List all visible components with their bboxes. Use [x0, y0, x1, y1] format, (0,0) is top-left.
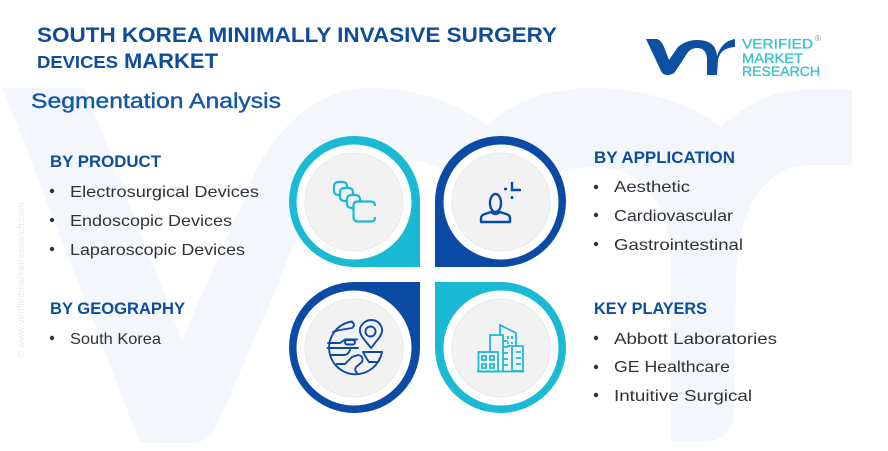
heading: by application: BY APPLICATION [594, 149, 735, 167]
logo wordmark: MARKET [742, 50, 803, 66]
panel: key players [594, 300, 777, 405]
title: DEVICES [37, 52, 118, 72]
list: applications: Aesthetic [614, 179, 690, 196]
logo mark: vm monogram [646, 39, 735, 75]
subtitle: segmentation analysis: Segmentation Analysis [31, 89, 281, 113]
list: key players: Intuitive Surgical [614, 388, 752, 405]
logo wordmark: RESEARCH [742, 63, 820, 79]
list: key players: Abbott Laboratories [614, 331, 777, 348]
logo registered mark: ® [815, 34, 821, 43]
list: key players [594, 331, 777, 405]
logo wordmark: VERIFIED [742, 36, 813, 52]
heading: key players: KEY PLAYERS [594, 300, 707, 318]
watermark: website url: © www.verifiedmarketresearch.com [16, 202, 26, 358]
teardrop: product [289, 136, 420, 267]
icon: globe with location pin [328, 320, 382, 374]
icon: person with focus marks [481, 182, 521, 222]
title: MARKET [124, 50, 218, 73]
list: key players: GE Healthcare [614, 359, 730, 376]
panel: by product [50, 153, 259, 259]
list: applications [594, 179, 743, 254]
list: products: Electrosurgical Devices [70, 184, 259, 201]
panel: by geography [50, 300, 185, 348]
list: geography: South Korea [70, 331, 161, 348]
title: SOUTH KOREA MINIMALLY INVASIVE SURGERY [37, 24, 557, 47]
teardrop: key players [435, 282, 566, 413]
teardrop: geography [289, 282, 420, 413]
list: applications: Gastrointestinal [614, 237, 743, 254]
title [37, 24, 557, 73]
heading: by product: BY PRODUCT [50, 153, 161, 171]
teardrop: application [435, 136, 566, 267]
logo: verified market research [646, 34, 821, 79]
list: products [50, 184, 259, 259]
icon: overlapping devices [334, 182, 375, 222]
watermark: background vr logo [3, 88, 852, 443]
panel: by application [594, 149, 743, 254]
list: applications: Cardiovascular [614, 208, 734, 225]
logo wordmark [742, 36, 820, 79]
icon: city buildings [477, 325, 524, 372]
list: products: Laparoscopic Devices [70, 242, 245, 259]
list: products: Endoscopic Devices [70, 213, 232, 230]
heading: by geography: BY GEOGRAPHY [50, 300, 185, 318]
